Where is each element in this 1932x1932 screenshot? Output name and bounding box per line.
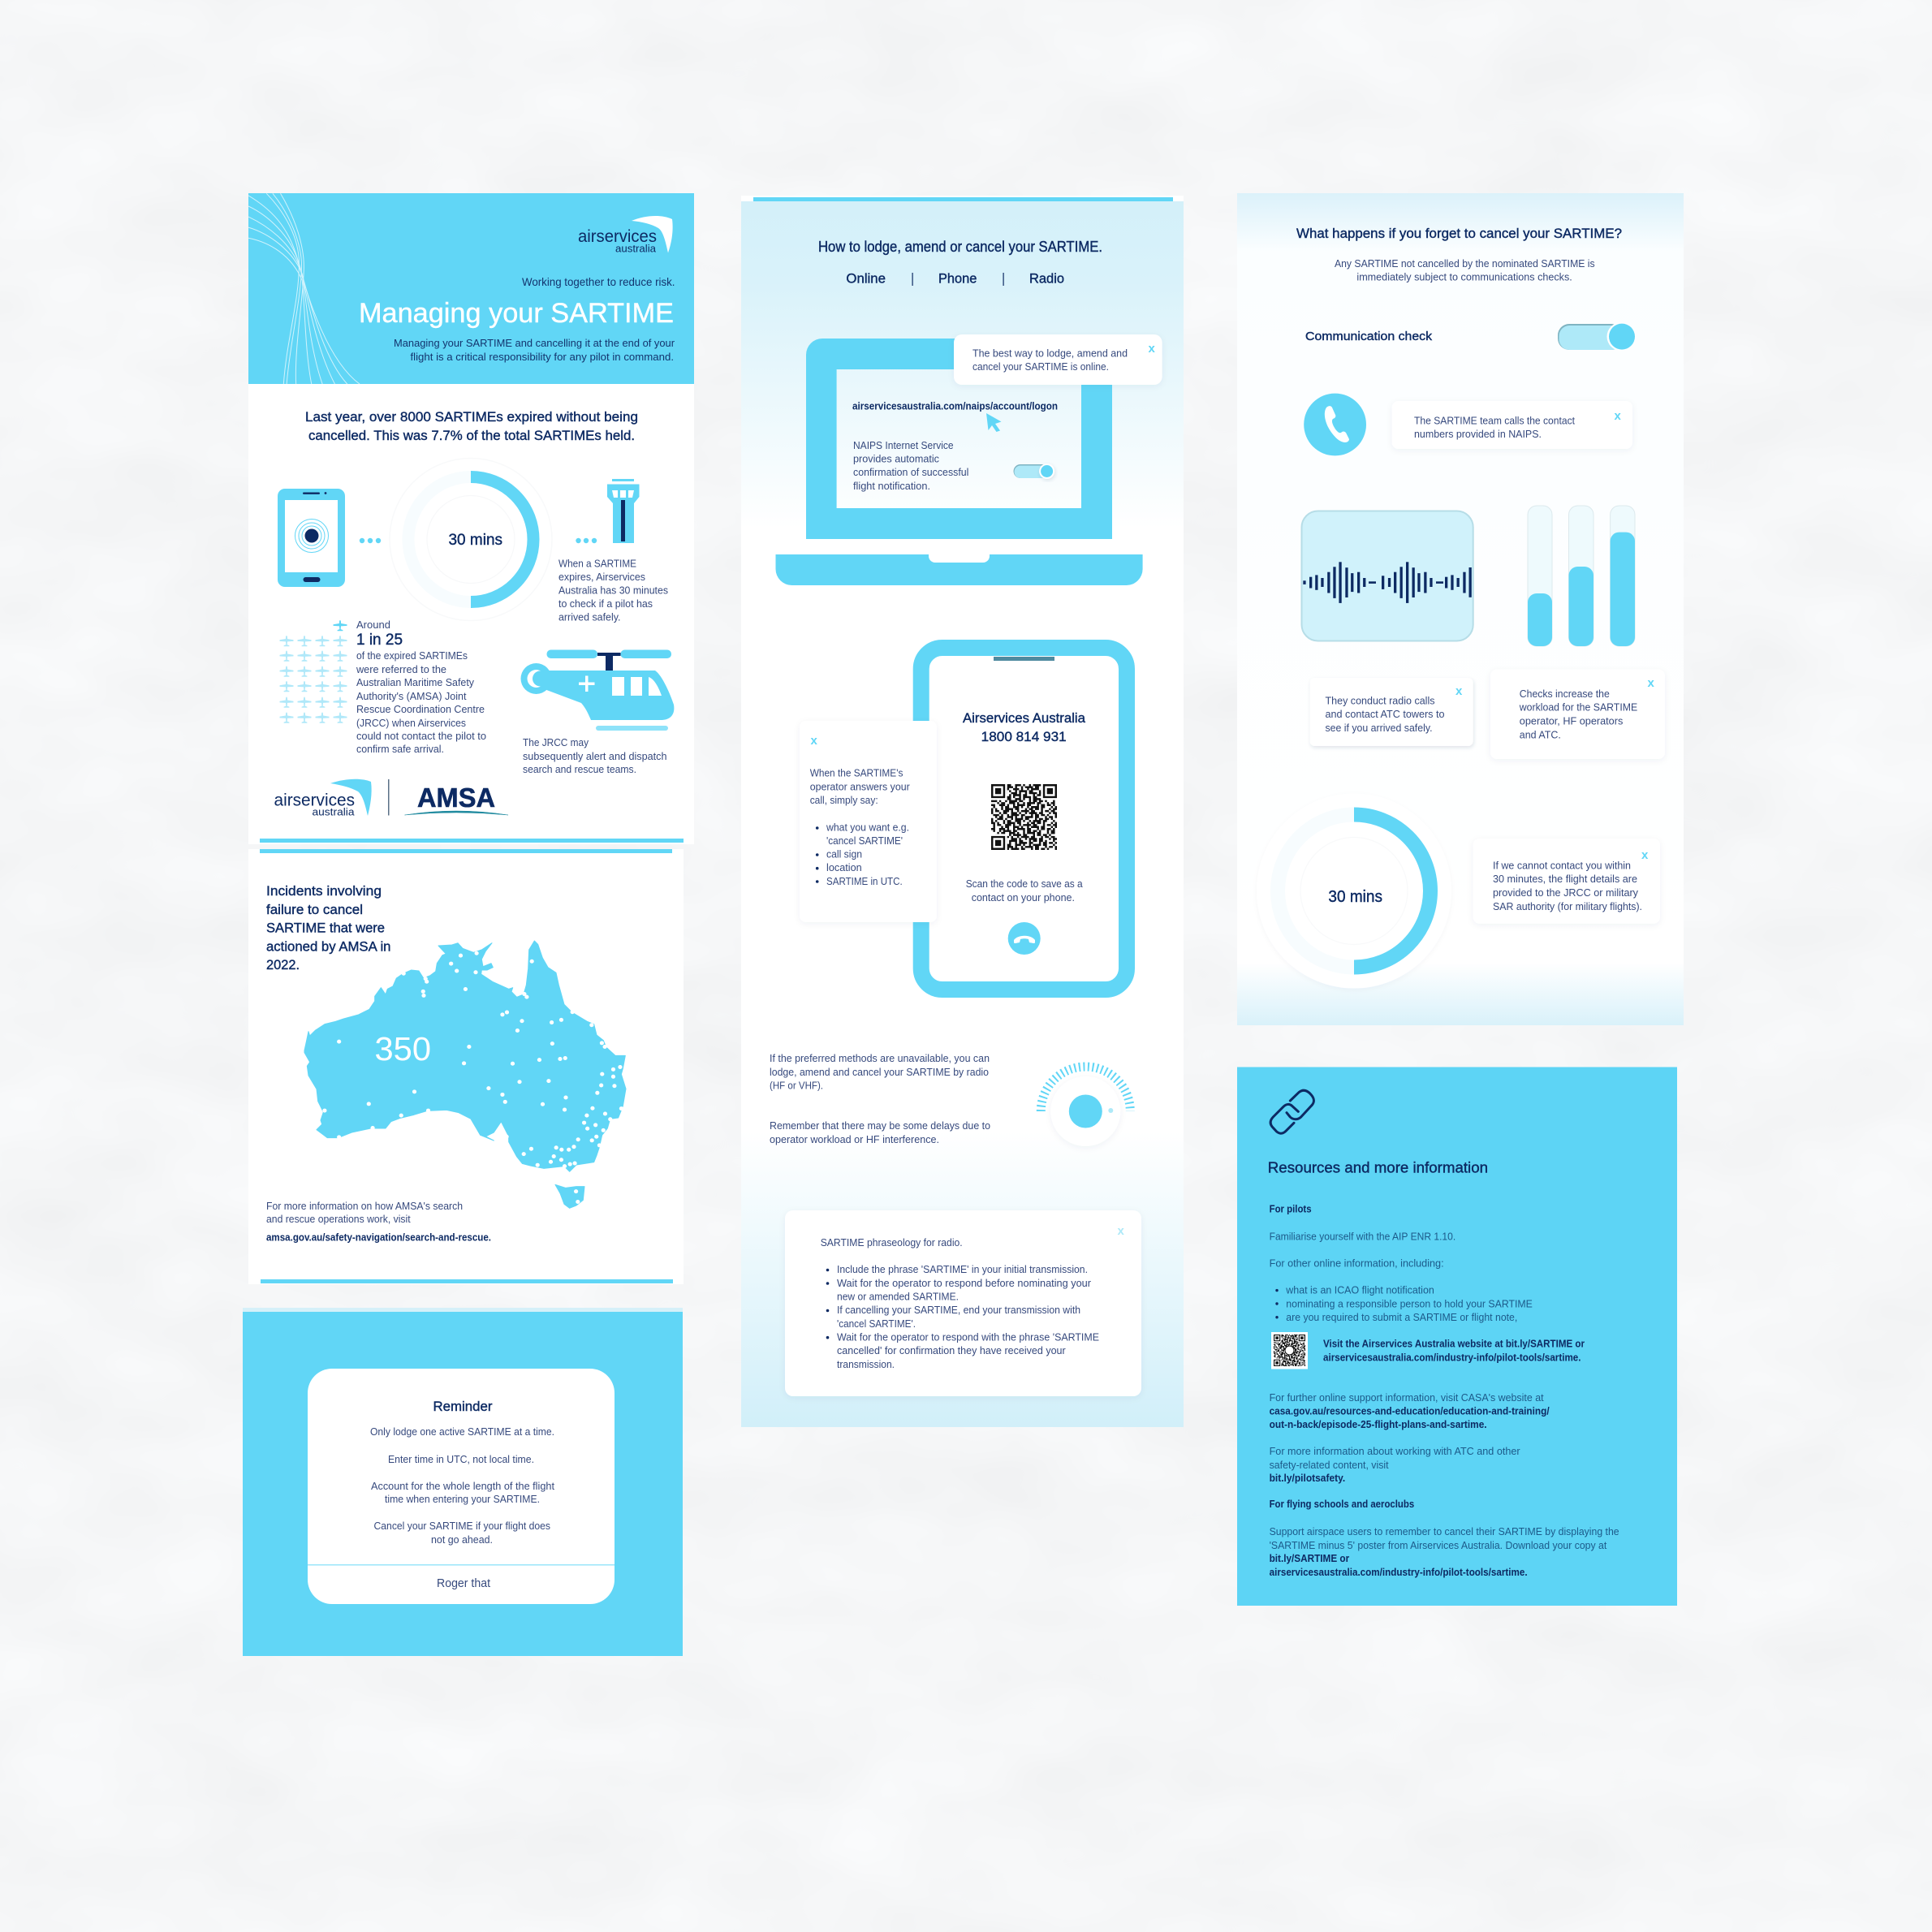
chart: 30 minute ring: 30 mins xyxy=(1328,888,1382,906)
panel: what happens xyxy=(1237,193,1684,1025)
text: 30 minutes: When a SARTIME xyxy=(558,557,636,570)
callout: what to say: SARTIME in UTC. xyxy=(826,875,903,887)
callout: team calls xyxy=(1392,401,1632,449)
connector dots left xyxy=(360,538,381,543)
heading xyxy=(266,883,391,972)
chart: 30 minute ring: 30 mins xyxy=(448,532,502,549)
callout: what to say xyxy=(800,721,937,922)
title: Managing your SARTIME xyxy=(359,298,674,329)
subtitle: Managing your SARTIME and cancelling it at the end of your xyxy=(394,337,675,349)
text: 30 minutes: arrived safely. xyxy=(558,610,620,623)
text: JRCC: search and rescue teams. xyxy=(523,763,636,775)
text: more information: and rescue operations work, visit xyxy=(266,1213,411,1225)
text: 1 in 25: Around xyxy=(356,619,390,631)
text: 1 in 25: Authority's (AMSA) Joint xyxy=(356,690,467,702)
reminder card: time when entering your SARTIME. xyxy=(385,1493,540,1505)
callout: radio calls: and contact ATC towers to xyxy=(1325,708,1445,720)
text: radio: operator workload or HF interference. xyxy=(770,1133,939,1145)
text: more information: amsa.gov.au/safety-navigation/search-and-rescue. xyxy=(266,1232,491,1244)
callout: radio calls: x xyxy=(1455,684,1463,698)
text: NAIPS: flight notification. xyxy=(853,480,930,492)
text: 30 minutes: expires, Airservices xyxy=(558,571,645,583)
callout: workload: operator, HF operators xyxy=(1520,714,1624,727)
logo: airservices australia footer: airservices xyxy=(274,791,355,810)
callout: phraseology: SARTIME phraseology for radio. xyxy=(821,1236,963,1248)
callout: phraseology: Wait for the operator to respond before nominating your xyxy=(837,1277,1092,1289)
links: Airservices website: Visit the Airservices Australia website at bit.ly/SARTIME or xyxy=(1323,1339,1585,1350)
section: for pilots: Familiarise yourself with the AIP ENR 1.10. xyxy=(1270,1231,1455,1242)
callout: radio calls: see if you arrived safely. xyxy=(1325,722,1432,734)
icon: helicopter xyxy=(521,649,674,731)
intro text: Any SARTIME not cancelled by the nominated SARTIME is xyxy=(1335,257,1595,270)
section: CASA: For further online support information, visit CASA's website at xyxy=(1270,1392,1544,1404)
icon: phone contact: Scan the code to save as a xyxy=(966,878,1083,890)
reminder card: Enter time in UTC, not local time. xyxy=(388,1453,534,1465)
toggle xyxy=(1013,464,1054,479)
section: flying schools: For flying schools and aeroclubs xyxy=(1270,1499,1414,1510)
logo: AMSA: AMSA xyxy=(417,783,495,813)
section: CASA: out-n-back/episode-25-flight-plans-and-sartime. xyxy=(1270,1419,1487,1430)
section: flying schools: bit.ly/SARTIME or xyxy=(1270,1553,1349,1564)
method tabs: Online xyxy=(846,271,886,287)
text: radio xyxy=(770,1052,990,1145)
text: radio: lodge, amend and cancel your SARTIME by radio xyxy=(770,1066,989,1078)
url: airservicesaustralia.com/naips/account/logon xyxy=(852,399,1058,412)
pictogram: 1 in 25 planes xyxy=(279,620,347,723)
callout: phraseology: 'cancel SARTIME'. xyxy=(837,1317,916,1330)
callout: workload: Checks increase the xyxy=(1520,688,1610,700)
logo: airservices australia footer xyxy=(274,779,372,818)
intro text xyxy=(1335,257,1595,283)
callout: phraseology: Wait for the operator to respond with the phrase 'SARTIME xyxy=(837,1331,1099,1343)
text: radio: (HF or VHF). xyxy=(770,1080,823,1092)
callout: phraseology: x xyxy=(1117,1224,1125,1238)
chart: 30 minute ring xyxy=(390,458,552,620)
map: Australia with incident dots xyxy=(304,941,626,1208)
icon: phone call xyxy=(1304,394,1366,455)
callout: what to say: x xyxy=(810,734,818,748)
text: JRCC: The JRCC may xyxy=(523,736,589,748)
callout: what to say: operator answers your xyxy=(810,781,910,793)
callout: what to say: call sign xyxy=(826,848,862,860)
callout: workload: x xyxy=(1648,676,1654,690)
reminder card xyxy=(308,1369,615,1604)
section: pilot safety: safety-related content, visit xyxy=(1270,1460,1389,1471)
section: for pilots: are you required to submit a SARTIME or flight note, xyxy=(1286,1312,1517,1323)
toggle xyxy=(1558,322,1635,351)
chart: 30 minute ring xyxy=(1257,794,1451,989)
callout: JRCC handover: SAR authority (for military flights). xyxy=(1493,900,1642,912)
method tabs: Radio xyxy=(1029,271,1064,287)
text: 1 in 25: of the expired SARTIMEs xyxy=(356,649,468,662)
panel: managing your SARTIME xyxy=(248,193,694,844)
section: CASA xyxy=(1270,1392,1550,1430)
chart: workload level bars xyxy=(1528,506,1635,646)
text: 1 in 25: (JRCC) when Airservices xyxy=(356,717,466,729)
text: NAIPS: provides automatic xyxy=(853,453,939,465)
heading: SARTIME that were xyxy=(266,921,385,935)
icon: link xyxy=(1270,1090,1314,1133)
callout: phraseology: If cancelling your SARTIME, end your transmission with xyxy=(837,1304,1080,1316)
links: Airservices website: airservicesaustralia.com/industry-info/pilot-tools/sartime. xyxy=(1323,1352,1581,1363)
text: NAIPS: confirmation of successful xyxy=(853,466,968,478)
icon: phone contact: Airservices Australia xyxy=(963,710,1086,726)
icon: hang up xyxy=(1008,922,1041,955)
text: NAIPS: NAIPS Internet Service xyxy=(853,439,954,451)
section: for pilots: For pilots xyxy=(1270,1204,1312,1215)
callout: what to say: 'cancel SARTIME' xyxy=(826,834,903,847)
text: 30 minutes: Australia has 30 minutes xyxy=(558,584,668,596)
logo: airservices australia: airservices xyxy=(578,227,657,246)
section: flying schools: 'SARTIME minus 5' poster from Airservices Australia. Download your copy at xyxy=(1270,1540,1607,1551)
text: 1 in 25: were referred to the xyxy=(356,663,446,675)
reminder card: not go ahead. xyxy=(431,1533,493,1546)
panel: resources xyxy=(1237,1067,1677,1606)
text: 1 in 25: Rescue Coordination Centre xyxy=(356,703,485,715)
headline statistic: Last year, over 8000 SARTIMEs expired without being xyxy=(305,409,638,425)
panel: incidents map xyxy=(248,849,684,1284)
header banner xyxy=(248,193,694,384)
callout: what to say: call, simply say: xyxy=(810,794,878,806)
icon: phone contact: contact on your phone. xyxy=(972,891,1075,903)
callout: JRCC handover: If we cannot contact you within xyxy=(1493,860,1631,872)
headline statistic: cancelled. This was 7.7% of the total SARTIMEs held. xyxy=(308,428,635,443)
text: 1 in 25: could not contact the pilot to xyxy=(356,730,486,742)
headline statistic xyxy=(305,409,638,443)
callout: workload xyxy=(1490,670,1665,759)
label: communication check: Communication check xyxy=(1305,330,1433,343)
section: for pilots: what is an ICAO flight notification xyxy=(1285,1285,1434,1296)
callout: JRCC handover: 30 minutes, the flight details are xyxy=(1493,873,1637,885)
icon: phone contact: 1800 814 931 xyxy=(981,729,1067,744)
heading: actioned by AMSA in xyxy=(266,938,391,955)
callout: online xyxy=(954,334,1162,385)
text: 1 in 25 xyxy=(356,619,486,755)
heading: Resources and more information xyxy=(1268,1159,1488,1175)
logo: airservices australia: australia xyxy=(615,242,657,255)
callout: what to say: When the SARTIME's xyxy=(810,767,903,779)
links: Airservices website xyxy=(1323,1339,1585,1363)
section: flying schools xyxy=(1270,1499,1619,1578)
callout: online: cancel your SARTIME is online. xyxy=(972,360,1109,373)
heading: failure to cancel xyxy=(266,902,363,917)
callout: radio calls xyxy=(1310,678,1473,746)
subtitle xyxy=(394,337,675,363)
callout: workload: workload for the SARTIME xyxy=(1519,701,1638,713)
callout: JRCC handover xyxy=(1473,839,1660,924)
reminder card: Only lodge one active SARTIME at a time. xyxy=(370,1425,554,1438)
text: more information xyxy=(266,1200,491,1244)
section: CASA: casa.gov.au/resources-and-education/education-and-training/ xyxy=(1270,1405,1550,1417)
map: Australia with incident dots: 350 xyxy=(375,1030,431,1067)
QR code: Airservices website xyxy=(1258,1332,1308,1369)
callout: online: x xyxy=(1148,342,1156,356)
reminder card: Reminder xyxy=(433,1399,493,1414)
panel: reminder xyxy=(243,1308,683,1656)
logo: airservices australia footer: australia xyxy=(312,805,355,818)
text: more information: For more information on how AMSA's search xyxy=(266,1200,463,1212)
callout: radio calls: They conduct radio calls xyxy=(1325,694,1435,706)
text: 30 minutes xyxy=(558,557,668,623)
callout: phraseology xyxy=(785,1210,1141,1396)
section: for pilots: For other online information, including: xyxy=(1270,1258,1444,1270)
icon: laptop xyxy=(776,339,1143,585)
section: for pilots: nominating a responsible person to hold your SARTIME xyxy=(1286,1298,1533,1309)
text: NAIPS xyxy=(853,439,968,492)
logo: airservices australia xyxy=(578,216,673,255)
reminder card: Account for the whole length of the flight xyxy=(371,1480,554,1492)
icon: audio waveform xyxy=(1302,511,1473,641)
icon: cursor xyxy=(986,413,1002,432)
callout: workload: and ATC. xyxy=(1520,729,1561,740)
heading: What happens if you forget to cancel your SARTIME? xyxy=(1296,226,1622,241)
section: for pilots xyxy=(1270,1204,1533,1323)
reminder card: Roger that xyxy=(437,1576,491,1590)
callout: phraseology: new or amended SARTIME. xyxy=(837,1291,959,1303)
subtitle: flight is a critical responsibility for any pilot in command. xyxy=(411,351,674,363)
text: 30 minutes: to check if a pilot has xyxy=(558,597,653,610)
heading: Incidents involving xyxy=(266,883,382,899)
section: pilot safety: bit.ly/pilotsafety. xyxy=(1270,1473,1345,1484)
text: JRCC: subsequently alert and dispatch xyxy=(523,750,667,762)
intro text: immediately subject to communications checks. xyxy=(1356,271,1572,283)
icon: radio dial xyxy=(1041,1067,1130,1146)
method tabs: Phone xyxy=(938,271,977,287)
panel: how to lodge xyxy=(741,196,1184,1427)
text: JRCC xyxy=(523,736,667,775)
heading: How to lodge, amend or cancel your SARTIME. xyxy=(818,239,1102,255)
method tabs xyxy=(846,271,1064,287)
text: 1 in 25: confirm safe arrival. xyxy=(356,743,444,755)
text: radio: If the preferred methods are unavailable, you can xyxy=(770,1052,990,1064)
tagline: Working together to reduce risk. xyxy=(522,275,675,288)
icon: control tower xyxy=(607,479,640,543)
section: flying schools: Support airspace users to remember to cancel their SARTIME by displaying the xyxy=(1270,1526,1619,1537)
callout: team calls: The SARTIME team calls the contact xyxy=(1414,414,1575,427)
heading: 2022. xyxy=(266,957,300,972)
callout: phraseology: transmission. xyxy=(837,1358,895,1370)
callout: team calls: x xyxy=(1614,409,1622,423)
callout: team calls: numbers provided in NAIPS. xyxy=(1414,428,1542,440)
text: radio: Remember that there may be some delays due to xyxy=(770,1119,990,1132)
connector dots right xyxy=(576,538,597,543)
icon: phone contact xyxy=(921,648,1127,990)
QR code xyxy=(960,784,1057,850)
section: flying schools: airservicesaustralia.com/industry-info/pilot-tools/sartime. xyxy=(1270,1567,1528,1578)
callout: online: The best way to lodge, amend and xyxy=(972,347,1128,360)
callout: phraseology: cancelled' for confirmation they have received your xyxy=(837,1344,1066,1356)
text: 1 in 25: Australian Maritime Safety xyxy=(356,676,474,688)
icon: phone with target xyxy=(278,489,345,587)
callout: what to say: what you want e.g. xyxy=(826,822,909,834)
callout: JRCC handover: x xyxy=(1641,848,1649,862)
callout: phraseology: Include the phrase 'SARTIME' in your initial transmission. xyxy=(837,1263,1088,1275)
callout: what to say: location xyxy=(826,861,862,873)
callout: JRCC handover: provided to the JRCC or military xyxy=(1493,886,1638,899)
reminder card: Cancel your SARTIME if your flight does xyxy=(373,1520,550,1532)
section: pilot safety xyxy=(1270,1446,1520,1484)
text: 1 in 25: 1 in 25 xyxy=(356,632,403,649)
section: pilot safety: For more information about working with ATC and other xyxy=(1270,1446,1520,1457)
